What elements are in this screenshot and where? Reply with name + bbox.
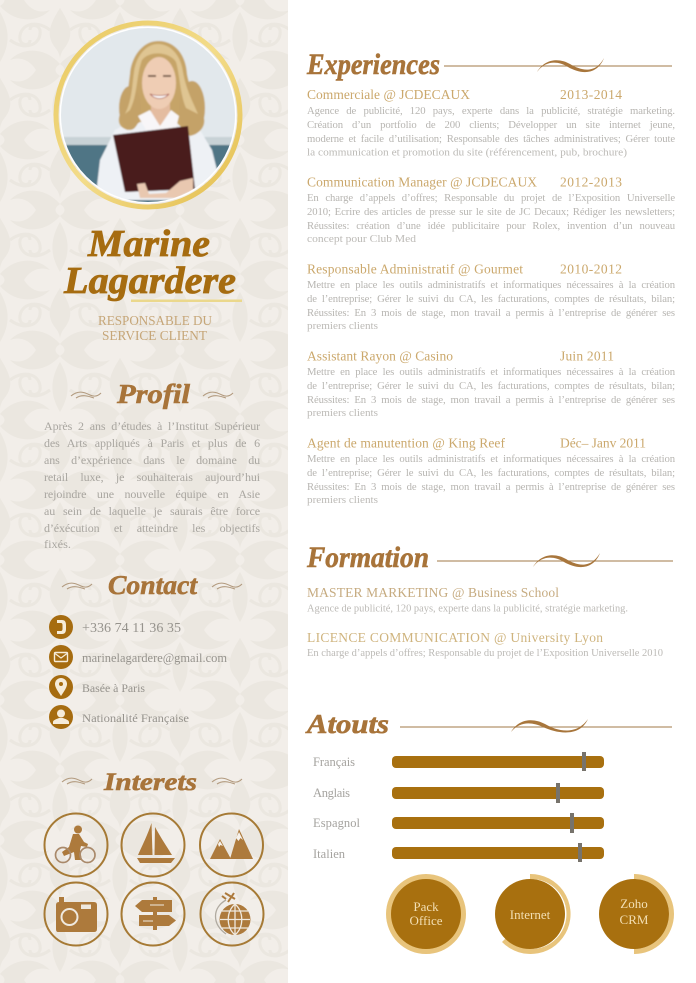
experience 5: Mettre en place les outils administratifs et informatiques nécessaires à la création: [307, 453, 675, 465]
contact: location: Basée à Paris: [82, 681, 145, 695]
experience 3: premiers clients: [307, 321, 378, 332]
experience 4: Réussites: En 3 mois de stage, mon travail a permis à l’entreprise de générer ses: [307, 394, 675, 406]
portrait photo: [55, 23, 245, 207]
experience 3: de l’entreprise; Gérer le suivi du CA, les facturations, comptes de résultats, bilan;: [307, 293, 675, 305]
formation 1: MASTER MARKETING @ Business School: [307, 585, 559, 600]
skill: Zoho CRM: Zoho: [620, 896, 648, 911]
heading: Contact: [62, 570, 242, 600]
text block: profile: retail luxe, je souhaiterais aujourd’hui: [44, 470, 260, 484]
experience 2: Communication Manager @ JCDECAUX: [307, 174, 537, 190]
experience 1: Commerciale @ JCDECAUX: [307, 87, 470, 102]
name: Marine: [87, 223, 210, 265]
icon: globe and plane: [200, 882, 264, 946]
formation 1: [307, 585, 628, 614]
experience 4: Mettre en place les outils administratifs et informatiques nécessaires à la création: [307, 366, 675, 378]
icon: cycling: [44, 814, 108, 876]
heading: Formation: [306, 541, 673, 574]
skill: Zoho CRM: CRM: [620, 912, 649, 927]
skill: Internet: Internet: [510, 907, 551, 922]
contact: nationality: [49, 705, 189, 729]
experience 1: Agence de publicité, 120 pays, experte dans la publicité, stratégie marketing.: [307, 105, 675, 117]
experience 2: En charge d’appels d’offres; Responsable du projet de l’Exposition Universelle: [307, 192, 675, 204]
experience 5: Réussites: En 3 mois de stage, mon travail a permis à l’entreprise de générer ses: [307, 481, 675, 493]
text block: profile: [44, 418, 260, 551]
heading: Atouts: Atouts: [305, 709, 389, 739]
icon: sailboat: [122, 814, 184, 876]
experience 3: [307, 262, 675, 332]
experience 1: 2013-2014: [560, 87, 622, 102]
experience 2: [307, 174, 675, 245]
text block: profile: d’éxécution et atteindre les objectifs: [44, 521, 260, 535]
text block: profile: Après 2 ans d’études à l’Institut Supérieur: [44, 419, 260, 433]
contact: phone: +336 74 11 36 35: [82, 620, 181, 635]
contact: email: marinelagardere@gmail.com: [82, 651, 227, 665]
heading: Atouts: [305, 709, 672, 739]
skill: Pack Office: Office: [410, 913, 443, 928]
name: [63, 223, 236, 302]
experience 1: Création d’un portfolio de 200 clients; Développer un site internet jeune,: [307, 119, 675, 131]
language bar: Anglais: [313, 783, 604, 803]
experience 5: Agent de manutention @ King Reef: [307, 436, 506, 450]
experience 5: premiers clients: [307, 495, 378, 506]
heading: Formation: Formation: [306, 541, 429, 574]
text block: profile: au sein de laquelle je saurais être force: [44, 504, 260, 518]
contact: phone: [49, 615, 181, 639]
experience 5: de l’entreprise; Gérer le suivi du CA, les facturations, comptes de résultats, bilan;: [307, 467, 675, 479]
experience 4: de l’entreprise; Gérer le suivi du CA, les facturations, comptes de résultats, bilan;: [307, 380, 675, 392]
name underline: [131, 300, 242, 302]
language bar: Français: [313, 752, 604, 771]
experience 5: [307, 436, 675, 506]
experience 3: 2010-2012: [560, 262, 622, 276]
language bar: Italien: [313, 843, 604, 862]
icon: camera: [44, 882, 108, 946]
skill: Pack Office: Pack: [413, 899, 439, 914]
experience 4: Assistant Rayon @ Casino: [307, 348, 453, 364]
formation 2: LICENCE COMMUNICATION @ University Lyon: [307, 630, 603, 645]
experience 3: Réussites: En 3 mois de stage, mon travail a permis à l’entreprise de générer ses: [307, 307, 675, 319]
panel: left sidebar: [0, 0, 288, 983]
language bar: Espagnol: Espagnol: [313, 816, 361, 830]
language bar: Français: Français: [313, 755, 355, 769]
formation 2: En charge d’appels d’offres; Responsable du projet de l’Exposition Universelle 2010: [307, 648, 663, 659]
skill: Pack Office: [386, 874, 466, 954]
formation 2: [307, 630, 663, 659]
experience 2: 2010; Ecrire des articles de presse sur le site de JC Decaux; Rédiger les newsletters;: [307, 206, 675, 218]
heading: Profil: Profil: [116, 379, 191, 409]
language bar: Espagnol: [313, 813, 604, 833]
experience 1: la communication et promotion du site (référencement, pub, brochure): [307, 148, 628, 158]
job title: [98, 313, 212, 343]
text block: profile: fixés.: [44, 537, 71, 551]
experience 1: [307, 87, 675, 158]
language bar: Italien: Italien: [313, 847, 346, 861]
language bar: Anglais: Anglais: [313, 786, 350, 800]
text block: profile: rejoindre une nouvelle équipe en Asie: [44, 487, 260, 501]
experience 3: Responsable Administratif @ Gourmet: [307, 262, 523, 276]
experience 5: Déc– Janv 2011: [560, 436, 646, 450]
skill: Zoho CRM: [599, 874, 674, 954]
heading: Experiences: Experiences: [306, 48, 440, 81]
icon: signpost: [122, 882, 184, 946]
contact: nationality: Nationalité Française: [82, 711, 189, 725]
experience 2: concept pour Club Med: [307, 234, 417, 245]
text block: profile: des Arts appliqués à Paris et plus de 6: [44, 436, 260, 450]
experience 2: Réussites: création d’une idée publicitaire pour Rolex, invention d’un nouveau: [307, 220, 675, 232]
name: Lagardere: [63, 260, 236, 302]
job title: RESPONSABLE DU: [98, 313, 212, 328]
heading: Experiences: [306, 48, 672, 81]
job title: SERVICE CLIENT: [102, 328, 208, 343]
contact: location: [49, 675, 145, 699]
heading: Interets: [62, 769, 242, 796]
heading: Contact: Contact: [108, 570, 199, 600]
experience 1: moderne et facile d’utilisation; Responsable des tâches administratives; Gérer toute: [307, 133, 675, 145]
formation 1: Agence de publicité, 120 pays, experte dans la publicité, stratégie marketing.: [307, 604, 628, 614]
experience 4: premiers clients: [307, 408, 378, 419]
heading: Profil: [71, 379, 233, 409]
experience 3: Mettre en place les outils administratifs et informatiques nécessaires à la création: [307, 279, 675, 291]
contact: email: [49, 645, 227, 669]
text block: profile: ans d’expérience dans le domaine du: [44, 453, 260, 467]
skill: Internet: [495, 874, 571, 954]
experience 4: Juin 2011: [560, 348, 614, 364]
heading: Interets: Interets: [103, 769, 197, 796]
experience 2: 2012-2013: [560, 174, 622, 190]
icon: mountains: [200, 814, 263, 876]
experience 4: [307, 348, 675, 419]
